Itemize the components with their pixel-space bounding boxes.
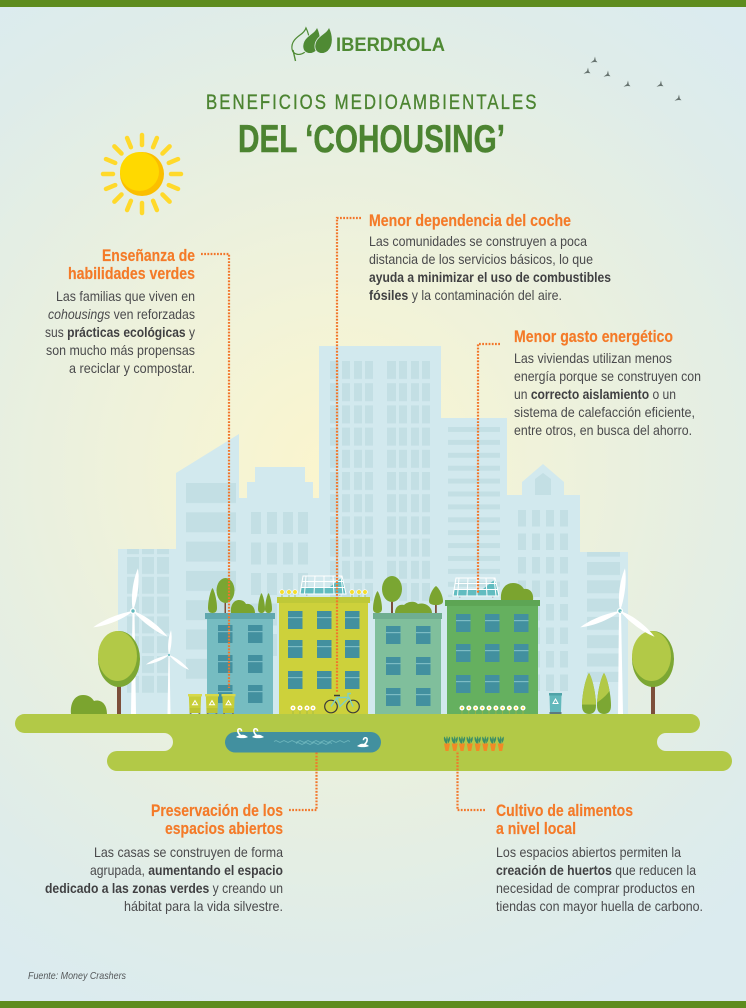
bottom bar: [0, 1001, 746, 1008]
body text: un correcto aislamiento o un: [514, 386, 676, 402]
connector: coche: [337, 218, 361, 692]
body text: [45, 844, 283, 914]
connector: habilidades verdes: [201, 254, 229, 688]
body text: distancia de los servicios básicos, lo que: [369, 251, 593, 267]
ground: [15, 714, 732, 771]
body text: sistema de calefacción eficiente,: [514, 404, 695, 420]
swans: [236, 729, 369, 747]
rooftop plants: [373, 576, 443, 613]
body text: cohousings ven reforzadas: [48, 306, 195, 322]
turbine: right: [580, 568, 657, 714]
solar panel: [300, 576, 346, 596]
building: right stripes: [441, 418, 507, 714]
building: teal: [205, 578, 275, 714]
body text: fósiles y la contaminación del aire.: [369, 287, 562, 303]
body text: ayuda a minimizar el uso de combustibles: [369, 269, 611, 285]
heading: espacios abiertos: [165, 820, 283, 838]
body text: son mucho más propensas: [46, 342, 195, 358]
icon: leaves: [292, 27, 332, 61]
body text: Las comunidades se construyen a poca: [369, 233, 587, 249]
body text: Los espacios abiertos permiten la: [496, 844, 681, 860]
turbines and left plants: [71, 568, 674, 714]
heading: Cultivo de alimentos: [496, 802, 633, 820]
body text: hábitat para la vida silvestre.: [124, 898, 283, 914]
bicycle: [325, 694, 359, 713]
heading: [151, 802, 283, 838]
building: angled roof: [176, 434, 239, 714]
turbine: left big: [93, 568, 170, 714]
water ripples: [274, 741, 350, 744]
heading: [496, 802, 633, 838]
turbine: left small: [146, 630, 190, 714]
body text: entre otros, en busca del ahorro.: [514, 422, 692, 438]
bush: left: [71, 695, 107, 714]
panel: menor dependencia del coche: [369, 212, 611, 303]
heading: habilidades verdes: [68, 265, 195, 283]
body text: Las casas se construyen de forma: [94, 844, 283, 860]
rooftop plants: [208, 578, 272, 613]
solar panel: [453, 578, 499, 598]
body text: [514, 350, 701, 438]
roof flowers: [280, 590, 367, 598]
daisies: [290, 706, 316, 714]
building: sea green: [373, 576, 443, 714]
building: tall tower: [319, 346, 441, 714]
roof bush: [501, 583, 533, 600]
title line 2: DEL ‘COHOUSING’: [238, 118, 505, 161]
cypress pair: right: [582, 673, 611, 714]
body text: energía porque se construyen con: [514, 368, 701, 384]
building: yellow: [277, 576, 370, 714]
body text: creación de huertos que reducen la: [496, 862, 696, 878]
heading: Enseñanza de: [102, 247, 195, 265]
daisies: [460, 706, 526, 714]
pond: [225, 729, 381, 752]
tree: left: [98, 631, 140, 714]
building: far right: [576, 552, 628, 714]
panel: cultivo de alimentos a nivel local: [496, 802, 703, 914]
skyline: [118, 346, 628, 714]
body text: agrupada, aumentando el espacio: [90, 862, 283, 878]
icon: sun: [103, 135, 181, 213]
body text: a reciclar y compostar.: [69, 360, 195, 376]
building: far left: [118, 549, 180, 714]
title: [206, 91, 536, 161]
top bar: [0, 0, 746, 7]
building: stepped roof: [239, 467, 322, 714]
body text: dedicado a las zonas verdes y creando un: [45, 880, 283, 896]
panel: preservación de los espacios abiertos: [45, 802, 283, 914]
recycling bins: yellow: [188, 694, 236, 715]
connector: espacios abiertos: [289, 752, 316, 810]
heading: Menor dependencia del coche: [369, 212, 571, 230]
heading: Preservación de los: [151, 802, 283, 820]
icon: birds: [584, 56, 682, 101]
body text: Las viviendas utilizan menos: [514, 350, 672, 366]
connector: cultivo: [458, 751, 485, 810]
source note: Fuente: Money Crashers: [28, 970, 127, 982]
body text: [369, 233, 611, 303]
title line 1: BENEFICIOS MEDIOAMBIENTALES: [206, 91, 536, 115]
body text: necesidad de comprar productos en: [496, 880, 695, 896]
dotted connectors: [201, 218, 500, 810]
building: green: [445, 578, 540, 714]
body text: Las familias que viven en: [56, 288, 195, 304]
connector: gasto energético: [478, 344, 500, 594]
logo: Iberdrola: [292, 27, 445, 61]
carrots: [444, 736, 504, 751]
panel: menor gasto energético: [514, 328, 701, 438]
heading: [68, 247, 195, 283]
body text: [496, 844, 703, 914]
tree: right: [632, 631, 674, 714]
body text: sus prácticas ecológicas y: [45, 324, 195, 340]
recycling bin: teal: [549, 693, 562, 714]
heading: Menor gasto energético: [514, 328, 673, 346]
right turbine blade over tree: [618, 609, 657, 638]
panel: enseñanza de habilidades verdes: [45, 247, 195, 376]
logo wordmark: IBERDROLA: [336, 35, 445, 56]
building: house gable: [507, 464, 580, 714]
body text: tiendas con mayor huella de carbono.: [496, 898, 703, 914]
heading: a nivel local: [496, 820, 576, 838]
body text: [45, 288, 195, 376]
